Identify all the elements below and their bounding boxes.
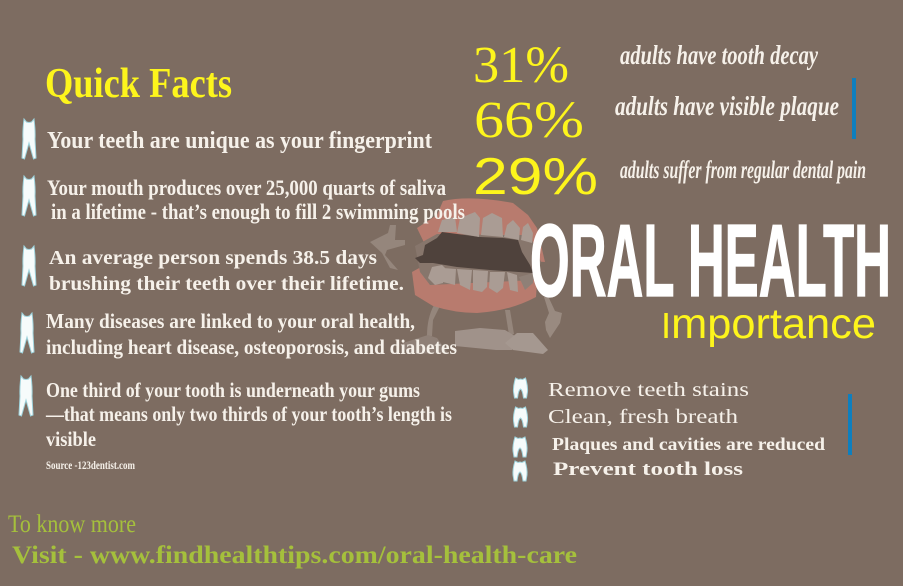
fact 3: brushing their teeth over their lifetime. — [49, 273, 404, 295]
fact 2 — [22, 175, 465, 224]
fact 1 — [22, 119, 432, 159]
lower gum — [412, 262, 538, 313]
fact 4: including heart disease, osteoporosis, and diabetes — [46, 335, 457, 359]
fact 3 — [22, 246, 404, 295]
fact 2: in a lifetime - that’s enough to fill 2 swimming pools — [51, 199, 465, 224]
benefit 4 — [513, 459, 743, 481]
source note: Source -123dentist.com — [46, 458, 135, 472]
benefit 1 — [513, 378, 749, 401]
stat 66%: adults have visible plaque — [615, 91, 839, 121]
benefits list — [513, 378, 825, 481]
stat 66% — [474, 91, 839, 149]
benefit 4: Prevent tooth loss — [553, 459, 743, 480]
fact 5: One third of your tooth is underneath your gums — [46, 378, 420, 402]
fact 5: —that means only two thirds of your tooth’s length is — [45, 402, 452, 426]
call to action: website link: Visit - www.findhealthtips.com/oral-health-care — [12, 542, 577, 569]
benefit 2: Clean, fresh breath — [548, 406, 738, 428]
fact 1: Your teeth are unique as your fingerprint — [47, 128, 432, 154]
mouth cavity — [415, 232, 533, 273]
mascot: cartoon teeth character — [370, 198, 562, 354]
upper teeth — [438, 212, 533, 243]
fact 2: Your mouth produces over 25,000 quarts of saliva — [47, 175, 446, 200]
title: Quick Facts: Quick Facts — [45, 61, 232, 107]
call to action: to know more: To know more — [8, 511, 136, 538]
benefit 3 — [513, 434, 825, 457]
fact 4: Many diseases are linked to your oral health, — [46, 309, 415, 333]
stat 31%: adults have tooth decay — [620, 40, 819, 70]
statistics — [473, 37, 866, 206]
inner shadow — [415, 234, 541, 285]
stat 29% — [473, 148, 866, 206]
hand left — [370, 225, 405, 270]
stat 31%: 31% — [473, 37, 569, 94]
benefit 2 — [513, 406, 738, 428]
fact 5 — [19, 376, 452, 451]
stat 31% — [473, 37, 819, 94]
stat 66%: 66% — [474, 92, 584, 149]
lower teeth — [428, 265, 533, 293]
benefit 3: Plaques and cavities are reduced — [552, 434, 825, 454]
legs and feet — [403, 305, 548, 354]
upper gum — [417, 198, 545, 262]
stat 29%: 29% — [473, 148, 598, 206]
hand right — [544, 296, 562, 338]
fact 5: visible — [46, 427, 96, 451]
fact 4 — [20, 309, 457, 359]
blue accent bar bottom — [848, 394, 852, 455]
fact list — [19, 119, 465, 451]
fact 3: An average person spends 38.5 days — [49, 247, 377, 269]
benefit 1: Remove teeth stains — [548, 379, 749, 401]
blue accent bar top — [852, 78, 856, 139]
subheading: importance: Importance — [661, 300, 876, 348]
